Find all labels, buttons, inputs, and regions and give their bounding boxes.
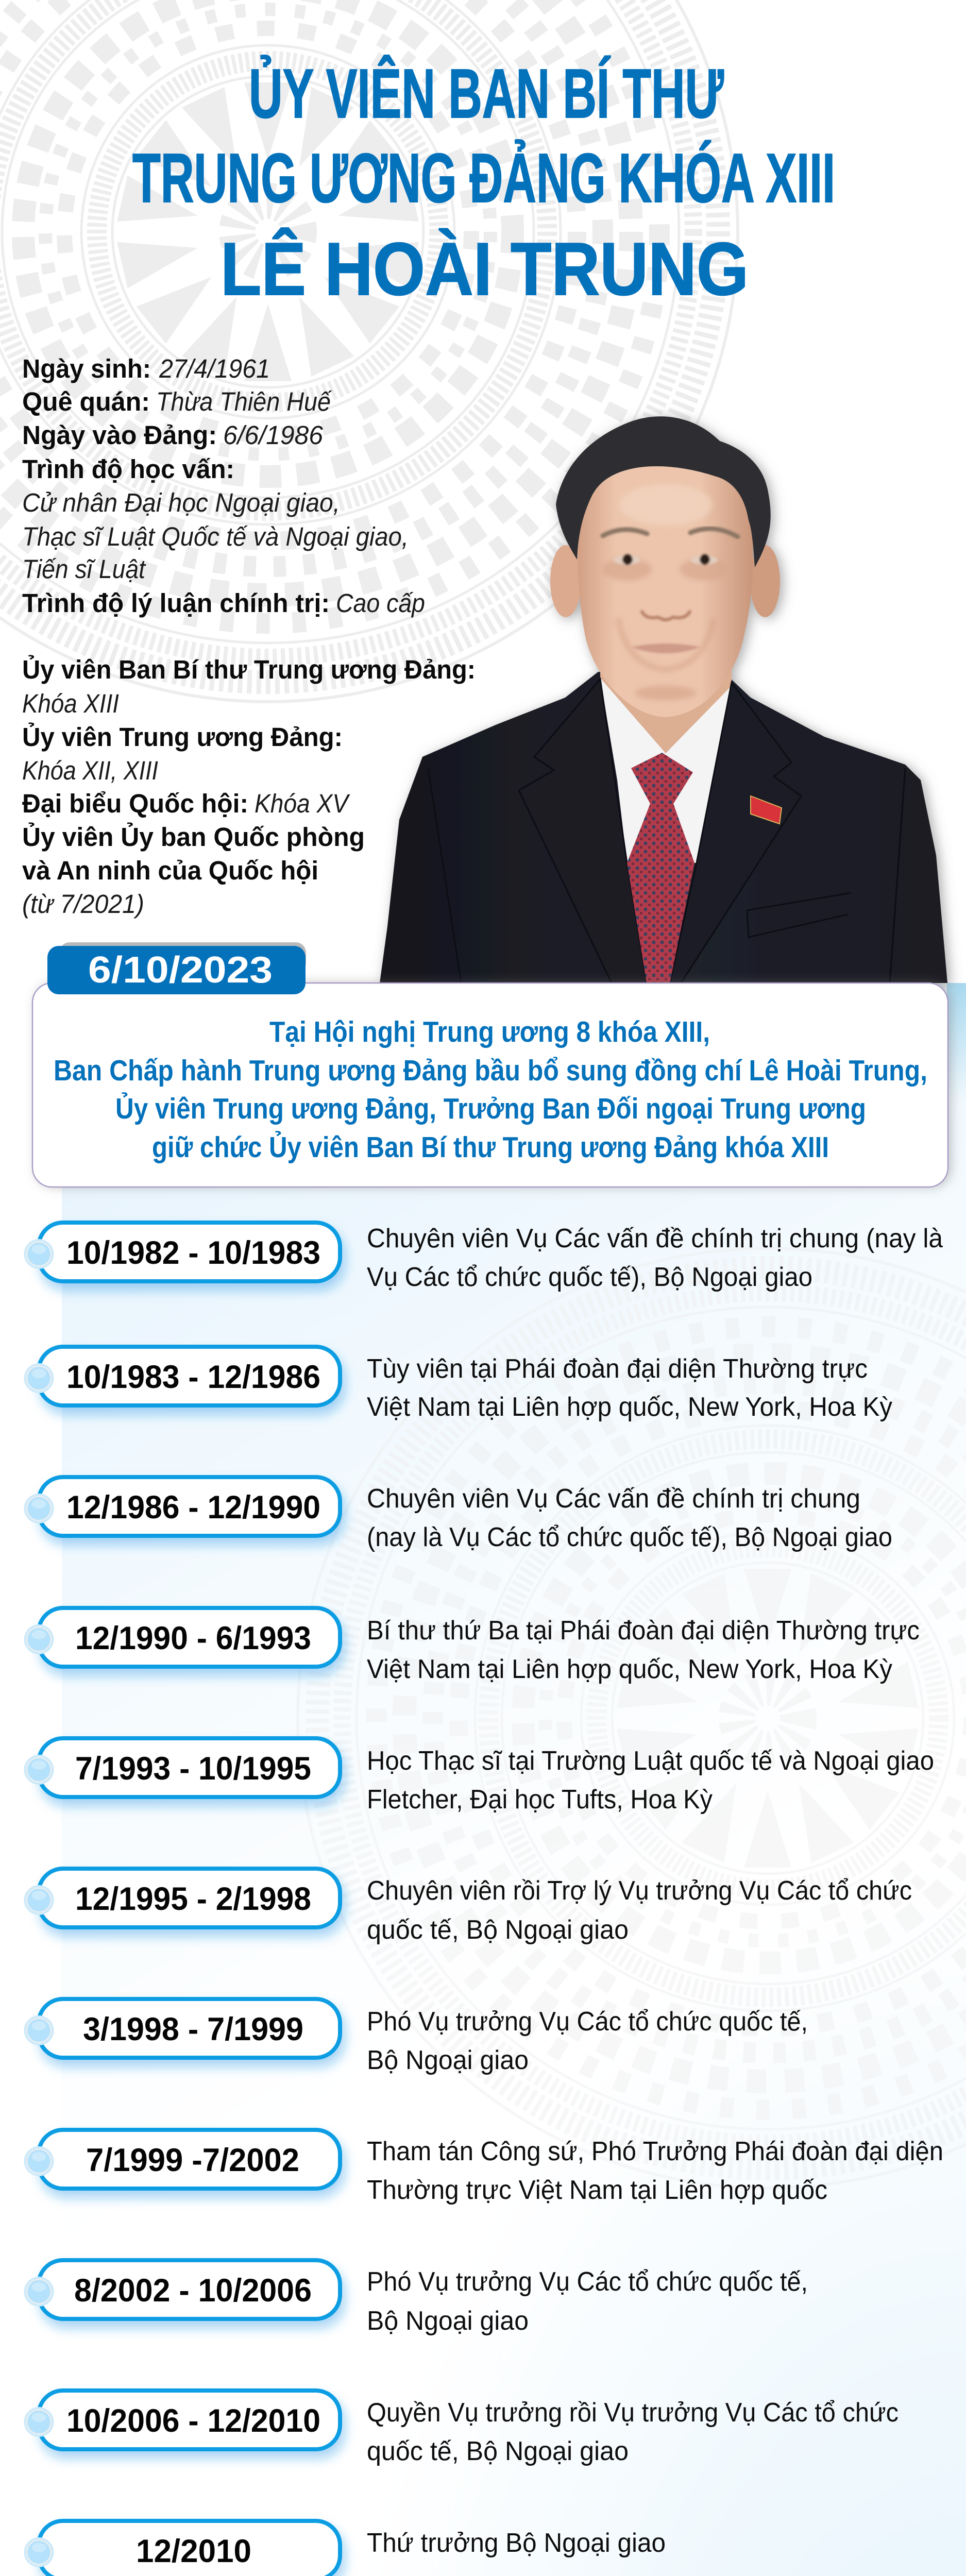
defence committee bbox=[22, 822, 365, 919]
title bbox=[132, 55, 835, 311]
left ear bbox=[550, 545, 581, 617]
portrait photo bbox=[380, 416, 947, 983]
defence committee: (từ 7/2021) bbox=[22, 889, 144, 919]
timeline row 3 bbox=[24, 1477, 892, 1552]
callout text: Ủy viên Trung ương Đảng, Trưởng Ban Đối ngoại Trung ương bbox=[115, 1092, 866, 1125]
sleeve seams bbox=[428, 768, 905, 983]
timeline row 5 bbox=[24, 1738, 934, 1815]
facial shading bbox=[602, 484, 729, 700]
secretariat member bbox=[22, 654, 476, 718]
timeline row 1: 10/1982 - 10/1983 bbox=[66, 1235, 320, 1271]
party date: 6/6/1986 bbox=[223, 420, 324, 450]
right ear bbox=[750, 545, 780, 617]
timeline row 5: Fletcher, Đại học Tufts, Hoa Kỳ bbox=[367, 1785, 713, 1815]
timeline row 4: Bí thư thứ Ba tại Phái đoàn đại diện Thường trực bbox=[367, 1616, 920, 1646]
birth date: Ngày sinh: bbox=[22, 354, 151, 383]
left lapel bbox=[519, 679, 647, 983]
timeline row 9: Bộ Ngoại giao bbox=[367, 2306, 529, 2336]
right lapel bbox=[670, 683, 801, 983]
central committee member: Ủy viên Trung ương Đảng: bbox=[22, 722, 343, 752]
nose bbox=[641, 611, 690, 620]
education: Trình độ học vấn: bbox=[22, 454, 234, 484]
suit bbox=[380, 672, 947, 983]
education bbox=[22, 454, 409, 584]
timeline row 10: 10/2006 - 12/2010 bbox=[66, 2403, 320, 2439]
timeline row 7 bbox=[24, 1999, 808, 2075]
timeline row 1: Chuyên viên Vụ Các vấn đề chính trị chung (nay là bbox=[367, 1224, 943, 1253]
party date: Ngày vào Đảng: bbox=[22, 420, 217, 450]
timeline row 8: Tham tán Công sứ, Phó Trưởng Phái đoàn đại diện bbox=[367, 2137, 943, 2166]
timeline row 7: Phó Vụ trưởng Vụ Các tổ chức quốc tế, bbox=[367, 2007, 808, 2037]
eyes bbox=[614, 554, 718, 565]
timeline row 10: quốc tế, Bộ Ngoại giao bbox=[367, 2436, 629, 2466]
birth date bbox=[22, 354, 270, 383]
timeline row 5: 7/1993 - 10/1995 bbox=[75, 1751, 311, 1787]
eyebrows bbox=[603, 529, 738, 537]
timeline row 6: Chuyên viên rồi Trợ lý Vụ trưởng Vụ Các tổ chức bbox=[367, 1876, 912, 1906]
timeline row 1: Vụ Các tổ chức quốc tế), Bộ Ngoại giao bbox=[367, 1262, 812, 1292]
timeline row 3: Chuyên viên Vụ Các vấn đề chính trị chung bbox=[367, 1484, 860, 1514]
timeline row 2 bbox=[24, 1347, 892, 1422]
timeline row 8: Thường trực Việt Nam tại Liên hợp quốc bbox=[367, 2175, 827, 2205]
secretariat member: Khóa XIII bbox=[22, 689, 119, 718]
national assembly deputy: Khóa XV bbox=[255, 789, 350, 818]
timeline row 7: 3/1998 - 7/1999 bbox=[83, 2011, 303, 2047]
timeline row 6 bbox=[24, 1869, 912, 1945]
political theory: Trình độ lý luận chính trị: bbox=[22, 588, 330, 618]
breast pocket bbox=[747, 893, 851, 937]
timeline row 10 bbox=[24, 2391, 899, 2466]
drum pattern lower right bbox=[298, 1248, 966, 2188]
defence committee: và An ninh của Quốc hội bbox=[22, 856, 318, 885]
timeline row 7: Bộ Ngoại giao bbox=[367, 2045, 529, 2075]
timeline row 9: 8/2002 - 10/2006 bbox=[74, 2273, 312, 2309]
education: Thạc sĩ Luật Quốc tế và Ngoại giao, bbox=[22, 522, 409, 551]
home town bbox=[22, 387, 332, 416]
timeline row 10: Quyền Vụ trưởng rồi Vụ trưởng Vụ Các tổ chức bbox=[367, 2398, 899, 2428]
timeline row 5: Học Thạc sĩ tại Trường Luật quốc tế và Ngoại giao bbox=[367, 1746, 934, 1776]
drum pattern top bbox=[0, 0, 738, 702]
timeline row 4 bbox=[24, 1608, 920, 1684]
timeline row 11: 12/2010 bbox=[136, 2533, 251, 2569]
tie bbox=[627, 753, 694, 983]
timeline row 4: 12/1990 - 6/1993 bbox=[75, 1620, 311, 1656]
face bbox=[578, 461, 753, 717]
shirt bbox=[600, 678, 732, 863]
central committee member bbox=[22, 722, 343, 785]
timeline row 11: Thứ trưởng Bộ Ngoại giao bbox=[367, 2528, 666, 2558]
date badge: 6/10/2023 bbox=[88, 950, 273, 991]
blue gradient panel bbox=[0, 983, 966, 2576]
home town: Thừa Thiên Huế bbox=[156, 387, 332, 416]
callout box bbox=[32, 983, 948, 1187]
secretariat member: Ủy viên Ban Bí thư Trung ương Đảng: bbox=[22, 654, 476, 684]
education: Cử nhân Đại học Ngoại giao, bbox=[22, 488, 340, 517]
timeline row 2: 10/1983 - 12/1986 bbox=[66, 1359, 320, 1395]
timeline row 3: 12/1986 - 12/1990 bbox=[66, 1489, 320, 1526]
timeline row 6: quốc tế, Bộ Ngoại giao bbox=[367, 1915, 629, 1945]
neck bbox=[600, 634, 732, 753]
timeline row 3: (nay là Vụ Các tổ chức quốc tế), Bộ Ngoại giao bbox=[367, 1522, 892, 1552]
timeline row 2: Việt Nam tại Liên hợp quốc, New York, Hoa Kỳ bbox=[367, 1392, 892, 1422]
timeline row 11 bbox=[24, 2521, 666, 2576]
lapel pin bbox=[751, 796, 782, 824]
date badge bbox=[47, 942, 306, 994]
timeline row 4: Việt Nam tại Liên hợp quốc, New York, Hoa Kỳ bbox=[367, 1654, 892, 1684]
political theory: Cao cấp bbox=[336, 588, 425, 618]
title: ỦY VIÊN BAN BÍ THƯ bbox=[249, 55, 724, 132]
home town: Quê quán: bbox=[22, 387, 150, 416]
central committee member: Khóa XII, XIII bbox=[22, 756, 158, 785]
personal info bbox=[22, 354, 476, 919]
timeline row 9 bbox=[24, 2260, 808, 2336]
timeline row 2: Tùy viên tại Phái đoàn đại diện Thường trực bbox=[367, 1354, 868, 1384]
timeline row 8: 7/1999 -7/2002 bbox=[86, 2142, 299, 2178]
defence committee: Ủy viên Ủy ban Quốc phòng bbox=[22, 822, 365, 852]
birth date: 27/4/1961 bbox=[159, 354, 270, 383]
timeline row 6: 12/1995 - 2/1998 bbox=[75, 1881, 311, 1917]
title: LÊ HOÀI TRUNG bbox=[221, 227, 749, 311]
timeline row 8 bbox=[24, 2130, 943, 2205]
timeline row 9: Phó Vụ trưởng Vụ Các tổ chức quốc tế, bbox=[367, 2267, 808, 2297]
party date bbox=[22, 420, 324, 450]
education: Tiến sĩ Luật bbox=[22, 554, 146, 584]
national assembly deputy: Đại biểu Quốc hội: bbox=[22, 789, 248, 818]
timeline row 1 bbox=[24, 1223, 943, 1292]
callout text bbox=[54, 1015, 927, 1164]
callout text: Tại Hội nghị Trung ương 8 khóa XIII, bbox=[269, 1015, 710, 1048]
mouth bbox=[631, 643, 701, 653]
hair bbox=[556, 416, 771, 567]
callout text: giữ chức Ủy viên Ban Bí thư Trung ương Đảng khóa XIII bbox=[152, 1130, 829, 1164]
